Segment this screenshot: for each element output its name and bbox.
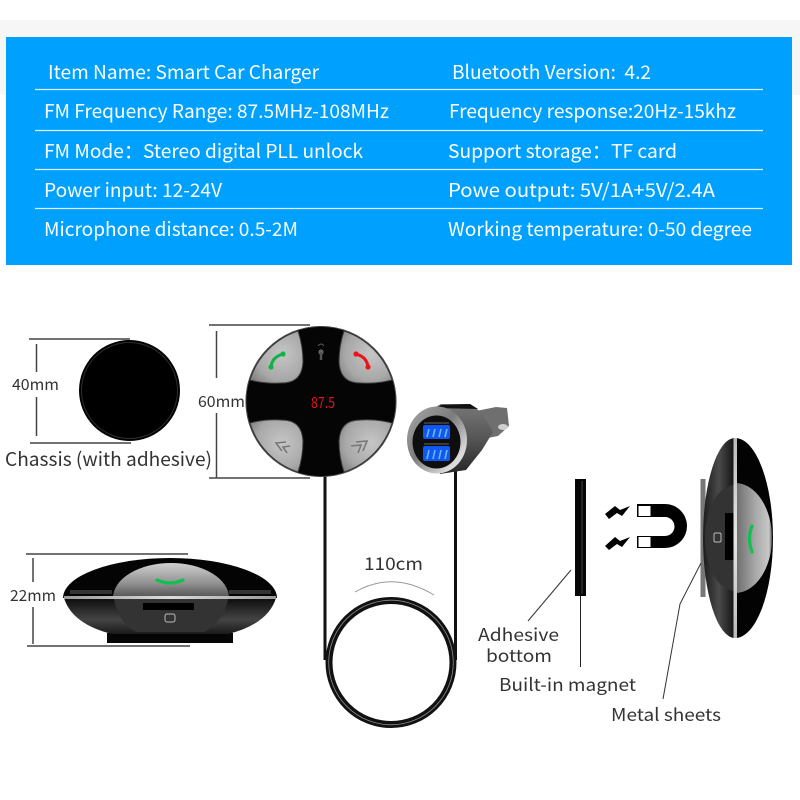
main device front with dimension <box>198 325 396 478</box>
spec: item name: Item Name: Smart Car Charger <box>48 58 320 85</box>
dome <box>113 563 229 598</box>
callout: adhesive bottom: Adhesive <box>478 622 559 647</box>
plug <box>476 407 509 438</box>
icon: green phone <box>157 580 183 583</box>
icon: green phone <box>750 526 752 552</box>
magnet strip <box>575 479 586 596</box>
dome <box>735 483 772 593</box>
icon: red phone <box>353 351 371 370</box>
slots <box>70 590 112 594</box>
callout: built-in magnet <box>499 596 636 697</box>
device side view on the right <box>700 438 773 638</box>
USB port upper <box>423 425 450 439</box>
back plate <box>700 479 706 597</box>
base <box>107 633 233 643</box>
display reading: 87.5 <box>311 392 335 413</box>
spec: power input: Power input: 12-24V <box>44 176 222 203</box>
callout: metal sheets: Metal sheets <box>611 702 721 727</box>
lower centre panel <box>114 599 228 632</box>
spec: frequency response: Frequency response:20Hz-15khz <box>449 97 736 124</box>
top grey background band <box>0 20 800 95</box>
callout: adhesive bottom <box>478 570 571 668</box>
seam <box>734 438 737 638</box>
centre panel <box>705 485 735 591</box>
label: 110cm with arc: 110cm <box>364 551 423 576</box>
spec: bluetooth version: Bluetooth Version: 4.2 <box>452 58 651 85</box>
outer shell right <box>735 438 773 638</box>
barrel <box>426 404 493 474</box>
upper shell <box>63 558 277 598</box>
outer shell left <box>703 438 735 638</box>
spec: microphone distance: Microphone distance: 0.5-2M <box>44 215 298 242</box>
spec: FM frequency range: FM Frequency Range: 87.5MHz-108MHz <box>44 97 389 124</box>
chassis with dimension <box>5 339 212 472</box>
icon: USB port <box>165 614 175 622</box>
device body <box>246 326 396 477</box>
label: chassis: Chassis (with adhesive) <box>5 445 212 472</box>
callout: adhesive bottom: bottom <box>486 643 552 668</box>
seam <box>64 596 276 599</box>
side view device with dimension <box>10 554 277 646</box>
spec: FM mode: FM Mode：Stereo digital PLL unlock <box>44 137 364 164</box>
callout: metal sheets <box>611 563 721 727</box>
USB port lower <box>423 446 450 461</box>
panel: specifications <box>6 37 792 265</box>
spec: working temperature: Working temperature: 0-50 degree <box>448 215 752 242</box>
ring <box>407 406 467 474</box>
label: 22mm: 22mm <box>10 584 56 606</box>
icon: microphone <box>318 344 324 360</box>
icon: green phone <box>268 351 286 370</box>
spec: power output: Powe output: 5V/1A+5V/2.4A <box>448 176 715 203</box>
label: 40mm: 40mm <box>12 373 59 395</box>
lower shell <box>64 598 276 634</box>
cables <box>325 470 456 725</box>
spec: support storage: Support storage：TF card <box>448 137 677 164</box>
icon: back arrows <box>276 442 290 453</box>
callout: built-in magnet: Built-in magnet <box>499 672 636 697</box>
car charger <box>407 404 509 474</box>
label: 60mm: 60mm <box>198 390 245 412</box>
device buttons <box>250 331 392 472</box>
icon: USB port <box>714 533 721 542</box>
label: 110cm with arc <box>355 551 434 595</box>
icon: forward arrows <box>351 441 367 453</box>
icon: magnetic waves <box>605 506 630 550</box>
icon: horseshoe magnet <box>637 504 687 548</box>
